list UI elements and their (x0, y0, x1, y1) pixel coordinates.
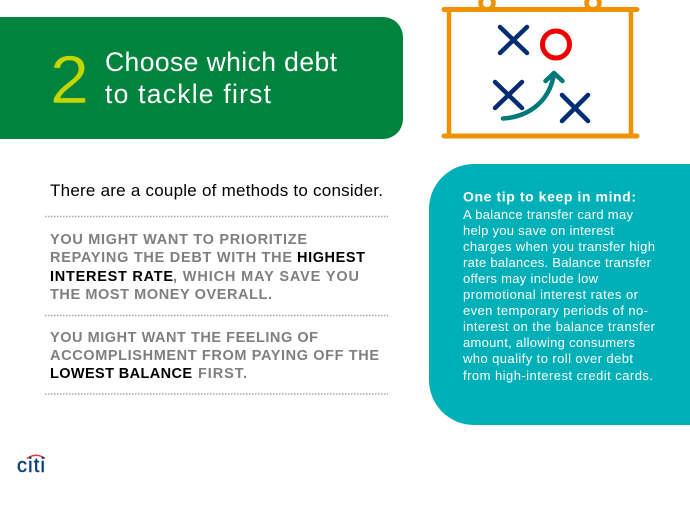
tip body text: promotional interest rates or (463, 287, 639, 302)
text block: highest interest rate method: HIGHEST (297, 250, 365, 266)
heading: Choose which debt (105, 47, 338, 77)
text block: highest interest rate method: INTEREST RATE (50, 269, 173, 285)
logo: citi: citi (17, 455, 45, 477)
icon: playbook whiteboard (444, 0, 637, 136)
tip body text (462, 207, 656, 383)
text block: highest interest rate method: THE MOST MONEY OVERALL. (50, 287, 272, 303)
tip body text: rate balances. Balance transfer (463, 255, 652, 270)
tip body text: interest on the balance transfer (463, 319, 656, 334)
tip body text: from high-interest credit cards. (463, 368, 653, 383)
text block: lowest balance method (50, 330, 379, 382)
text block: lowest balance method: FIRST. (198, 366, 247, 382)
heading: to tackle first (105, 79, 272, 109)
tip body text: help you save on interest (463, 223, 614, 238)
text block: lowest balance method: YOU MIGHT WANT THE FEELING OF (50, 330, 318, 346)
text block: highest interest rate method: YOU MIGHT WANT TO PRIORITIZE (50, 232, 307, 248)
text block: lowest balance method: LOWEST BALANCE (50, 366, 192, 382)
tip body text: amount, allowing consumers (463, 335, 636, 350)
tip body text: charges when you transfer high (463, 239, 655, 254)
heading (105, 47, 338, 109)
text block: highest interest rate method: , WHICH MAY SAVE YOU (173, 269, 359, 285)
tip heading: One tip to keep in mind: (463, 188, 636, 204)
step number 2: 2 (50, 42, 89, 118)
text block: highest interest rate method (50, 232, 365, 303)
tip body text: offers may include low (463, 271, 599, 286)
panel: green heading banner (0, 17, 403, 139)
tip body text: even temporary periods of no- (463, 303, 648, 318)
text block: lowest balance method: ACCOMPLISHMENT FROM PAYING OFF THE (50, 348, 379, 364)
tip body text: who qualify to roll over debt (462, 351, 633, 366)
panel: tip callout (429, 164, 690, 425)
text block: highest interest rate method: REPAYING THE DEBT WITH THE (50, 250, 292, 266)
intro text: There are a couple of methods to consider. (50, 181, 383, 200)
tip body text: A balance transfer card may (463, 207, 634, 222)
